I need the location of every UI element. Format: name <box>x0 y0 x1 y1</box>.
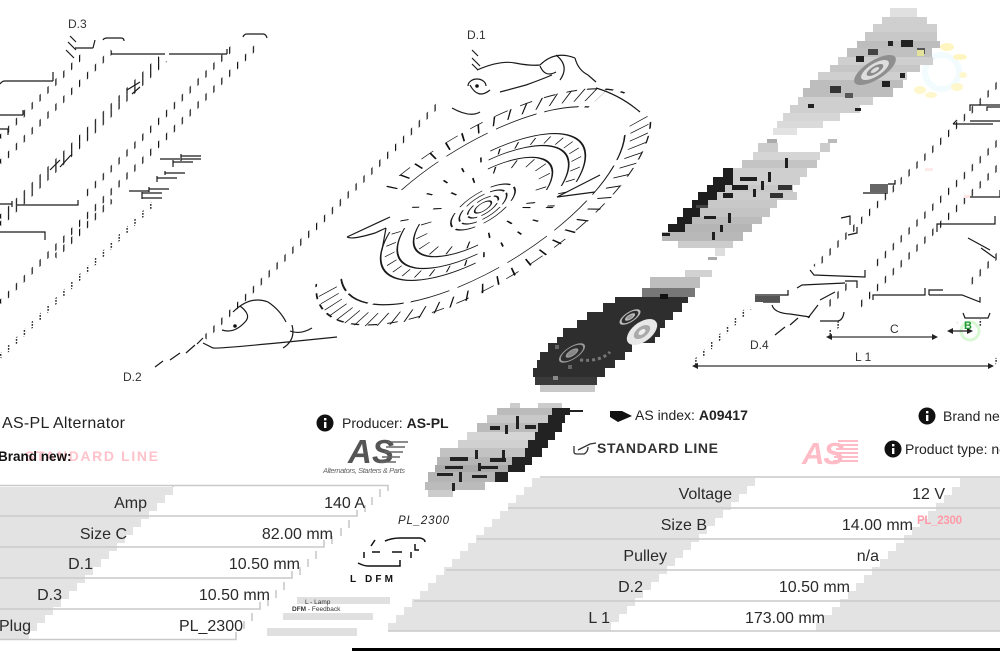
row: D.1: 10.50 mm <box>229 556 300 573</box>
pin legend: DFM - Feedback <box>292 606 341 613</box>
icon: plug outline <box>358 538 425 566</box>
row: L 1: 173.00 mm <box>745 610 825 627</box>
photo: alternator side view <box>662 139 837 260</box>
standard line badge: STANDARD LINE <box>597 440 718 456</box>
table grey staircase column <box>0 487 173 639</box>
pin legend: L - Lamp <box>305 599 331 606</box>
dimension: L1: L 1 <box>855 350 872 364</box>
icon: tag <box>610 411 632 422</box>
left header: brand and line: STANDARD LINE <box>25 448 158 464</box>
dimension: C: C <box>890 322 899 336</box>
logo: AS grey: Alternators, Starters & Parts <box>322 466 405 475</box>
row: Size B: 14.00 mm <box>842 517 913 534</box>
photo: alternator rear view <box>533 270 712 392</box>
logo: AS pink: AS <box>801 436 844 471</box>
producer line: Producer: AS-PL <box>342 415 449 431</box>
pink plug code: PL_2300 <box>917 515 962 527</box>
row: Amp: Amp <box>114 495 147 512</box>
row: D.2 <box>618 579 850 596</box>
dimension: L1 <box>692 350 994 369</box>
row: Voltage: 12 V <box>912 486 945 503</box>
photo: alternator front view <box>773 8 940 135</box>
left header: brand and line: Brand new: <box>0 449 72 464</box>
row: D.1: D.1 <box>68 556 93 573</box>
row: Size C: 82.00 mm <box>262 526 333 543</box>
dotted extension lines <box>692 307 996 366</box>
icon: info <box>316 414 334 432</box>
row: Voltage <box>679 486 945 503</box>
index line: AS index: A09417 <box>635 407 748 423</box>
table grey staircase left column <box>388 478 755 631</box>
left header: title: AS-PL Alternator <box>2 415 126 432</box>
technical drawing: right side view <box>692 82 1000 369</box>
icon: badge <box>574 443 596 454</box>
faint colour marks <box>914 43 970 198</box>
label: D.2: D.2 <box>123 370 142 384</box>
row: Size B <box>661 517 913 534</box>
row: Amp <box>114 495 365 512</box>
row: D.2: D.2 <box>618 579 643 596</box>
row: Voltage: Voltage <box>679 486 732 503</box>
icon: info <box>918 408 936 424</box>
table grey staircase right column <box>816 478 1000 631</box>
bottom black bar <box>352 648 1000 651</box>
row: Pulley <box>623 548 879 565</box>
logo: AS grey <box>322 433 408 475</box>
right spec table <box>388 477 1000 631</box>
dimension: C <box>826 322 938 340</box>
sheared rotor and rings <box>255 89 716 325</box>
dimension: B with green highlight <box>947 320 979 340</box>
dimension: B with green highlight: B <box>964 320 972 332</box>
row: L 1: L 1 <box>588 610 610 627</box>
row: Size C <box>80 526 333 543</box>
row: L 1 <box>588 610 825 627</box>
row: D.1 <box>68 556 300 573</box>
row: D.2: 10.50 mm <box>779 579 850 596</box>
technical drawing: centre front view <box>123 28 716 384</box>
row: Amp: 140 A <box>324 495 365 512</box>
label: L DFM: L DFM <box>350 574 393 585</box>
row: D.3 <box>37 587 270 604</box>
row: Plug <box>0 618 243 635</box>
row: Size C: Size C <box>80 526 127 543</box>
row: Plug: PL_2300 <box>179 618 243 635</box>
logo: AS grey: AS <box>347 433 394 470</box>
hatched shaft details <box>755 180 895 302</box>
icon: info <box>884 440 902 458</box>
label: PL_2300: PL_2300 <box>398 515 450 527</box>
brand new line <box>918 408 1000 424</box>
row: Pulley: n/a <box>857 548 879 565</box>
label: D.3: D.3 <box>68 17 87 31</box>
pin legend <box>267 597 390 636</box>
row: D.3: D.3 <box>37 587 62 604</box>
row: Pulley: Pulley <box>623 548 667 565</box>
left spec table <box>0 486 388 640</box>
row: Size B: Size B <box>661 517 707 534</box>
row: D.3: 10.50 mm <box>199 587 270 604</box>
label: D.4: D.4 <box>750 338 769 352</box>
technical drawing: left side view <box>0 17 267 357</box>
plug connector diagram <box>350 515 450 585</box>
photo: alternator side view, lower <box>425 403 583 497</box>
label: D.1: D.1 <box>467 28 486 42</box>
